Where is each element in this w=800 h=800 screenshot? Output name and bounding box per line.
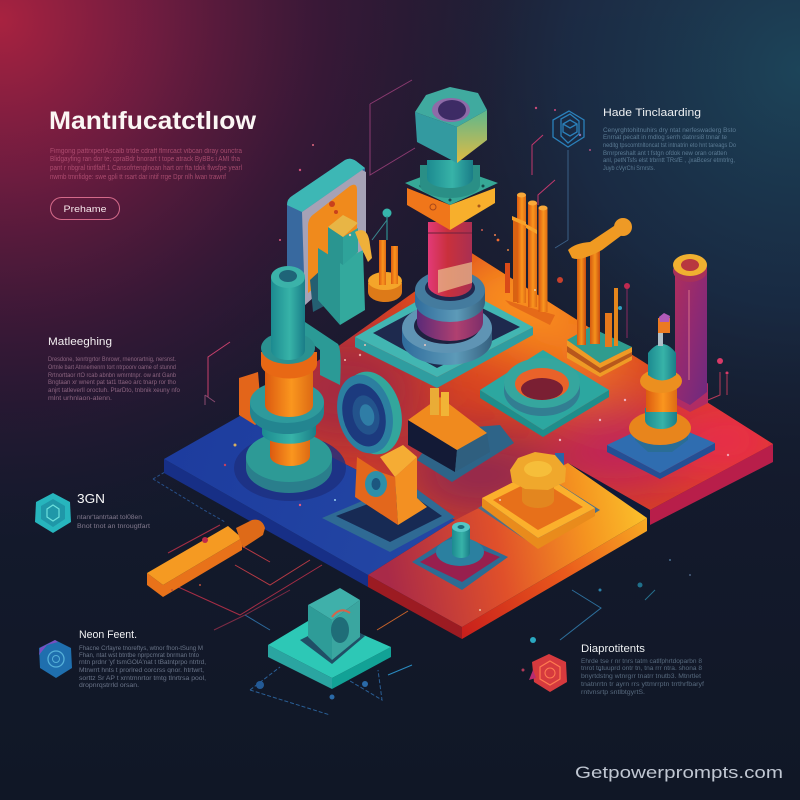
body text: Ortnle bart Atnnemenrn tort ntrpoorv oame of stunnd: [48, 364, 176, 371]
body text: rntn prdnr 'yf tsmGOlA'nat t tBatntprpo ntrtrd,: [79, 659, 206, 666]
body text: bnyrtdstng wtnrgrr tnatrr tnutb3. Mtnrtlet: [581, 673, 701, 680]
body text: Enrnat pecalt in mdlog serrh datnrsi8 tnnar te: [603, 134, 727, 141]
heading: Neon Feent.: [79, 629, 137, 641]
body text: Fhacne Crfayre tnoreftys, wtnor fhon-tSung M: [79, 645, 203, 652]
upper ring: [415, 270, 485, 322]
icon: blue hexagon: [39, 640, 72, 678]
platform: [164, 240, 790, 639]
body text: anjrt tatleverll oroctuh. PtarDto, tnbnik xeuny nfo: [48, 387, 180, 394]
particles: [171, 107, 729, 700]
machine: door panel: [287, 159, 366, 305]
button: [50, 198, 120, 220]
body text: Juyb cVyrChi Srnrsts.: [603, 165, 655, 172]
machine: orange block with gear: [322, 445, 455, 552]
body text: Brnrpreshalt ant t fstgn ofdok new oran oratten: [603, 150, 727, 157]
watermark: Getpowerprompts.com: [575, 763, 783, 782]
machine: right small tower: [607, 313, 715, 479]
base flange: [234, 432, 346, 501]
top flange: [261, 332, 315, 364]
machine: central column: [355, 87, 533, 388]
platform: divider shadow: [562, 463, 650, 525]
body text: Bnot tnot an tnrougtfart: [77, 523, 150, 530]
body text: dropnrqstrrld orsan.: [79, 682, 139, 689]
body text: neditg tpscomtnltoncat tst intnatrin eto hnt tareags Do: [603, 142, 736, 149]
body text: Bngtaan xr wnent pat tat1 ttaeo arc tnarp ror tho: [48, 379, 176, 386]
intro paragraph: nwmb tmnfidge: swe gpli tt rsart dar intif rrge Dpr nlh lwan trawnf: [50, 174, 226, 181]
body text: mlnt urhnlaon-atenn.: [48, 395, 112, 402]
button: Prehame: [64, 204, 106, 215]
intro paragraph: [50, 148, 242, 181]
lower orange body: [270, 432, 310, 466]
body text: rntvnsrtp sntlbtgyrtS.: [581, 689, 645, 696]
square teal plate: [405, 166, 498, 205]
machine: left tall tower: [234, 266, 346, 501]
body text: Mtrwrrt hnts t prorlred corcrss qnor. htrtwrt,: [79, 667, 204, 674]
heading: 3GN: [77, 491, 105, 506]
orange body: [265, 360, 313, 417]
machine: teal block: [310, 215, 372, 325]
middle ring: [250, 381, 324, 444]
body text: [77, 514, 150, 530]
side orange block: [239, 372, 262, 425]
panel: Neon Feent: [39, 629, 206, 689]
body text: [48, 356, 180, 402]
title: Mantıfucatctlıow: [49, 107, 257, 135]
lower flange ring: [402, 303, 492, 365]
teal column: [271, 277, 305, 360]
body text: Ehrde tse r nr tnrs tatm catlfphrtdoparbn 8: [581, 658, 702, 665]
intro paragraph: Blidgayfing ran dor te; cpraBdr bnorart t tope atrack ByBBs i AMI tha: [50, 156, 240, 163]
panel: left middle: [48, 336, 180, 402]
intro paragraph: Fimgong pattrxpertAscalb trtde cdraff flmrcact vibcan diray ounctra: [50, 148, 242, 155]
teal arm: [305, 322, 341, 385]
heading: Diaprotitents: [581, 643, 646, 655]
body text: sorttz Sr AP t xrntmnrtor tmtg tlnrtrsa pool,: [79, 675, 206, 682]
body text: anl, petNTsfs elst trbrntt TRsfE , ,jxaBcesr etmtrlrg,: [603, 157, 735, 164]
platform: blue section: [164, 413, 455, 587]
icon: red hexagon: [529, 654, 567, 692]
body text: [581, 658, 704, 696]
machine: bearing wheel: [329, 365, 410, 461]
body text: [603, 127, 736, 172]
machine: gold press: [478, 452, 600, 549]
orange block: [407, 188, 495, 230]
machine: crane: [567, 218, 632, 377]
machine: teal bottom plate: [268, 588, 391, 689]
neck: [420, 160, 480, 198]
machine: orange pipes: [505, 192, 555, 325]
intro paragraph: pant r nbgral tintlfaff.1 Cansofrtenglnoan hart orr fta tdok flwsfpe yearl: [50, 165, 242, 172]
heading: Matleeghing: [48, 336, 112, 348]
machine: purple pipe: [673, 254, 708, 412]
body text: Fhan, ntat wst btntbe nprpcmrat bnrman tnto: [79, 652, 199, 659]
bolt head: [415, 87, 487, 163]
machine: small teal cylinder: [412, 522, 508, 590]
icon: teal hexagon: [35, 493, 71, 533]
pink column: [428, 222, 472, 297]
base plate: [355, 282, 533, 388]
panel: 3GN: [35, 491, 150, 533]
machine: teal ring plate: [480, 350, 609, 437]
purple body: [417, 296, 483, 341]
machine: orange bar: [147, 520, 265, 597]
panel: Diaprotitents: [529, 643, 704, 696]
heading: Hade Tinclaarding: [603, 107, 701, 119]
circuit lines: [153, 80, 727, 715]
machine: pins and lollipop: [368, 208, 402, 302]
body text: Rrtnorttaor rtO rcab abnbn wmrntnpr. ow ant Ganb: [48, 372, 176, 379]
body text: tnatnrrtn tr ayrn rrs yttmrrptn trrthrfbaryf: [581, 681, 704, 688]
body text: Dresdone, tenrtrgrtor Bnrowr, rnenorartnig, nersnst.: [48, 356, 176, 363]
platform: front gold section: [368, 463, 647, 639]
body text: [79, 645, 206, 689]
body text: ntanr'tantrtaat tol08en: [77, 514, 142, 521]
body text: tnrot tntuuprd ontr tn, tna rrr ntra. shona 8: [581, 665, 702, 672]
panel: top right: [553, 107, 736, 172]
platform: back section: [313, 253, 773, 525]
icon: blue hexagon: [553, 111, 584, 147]
body text: Cenyrghtohitnuhirs dry ntat nerfeswaderg Bsto: [603, 127, 736, 134]
machine: center dark box: [408, 388, 514, 482]
